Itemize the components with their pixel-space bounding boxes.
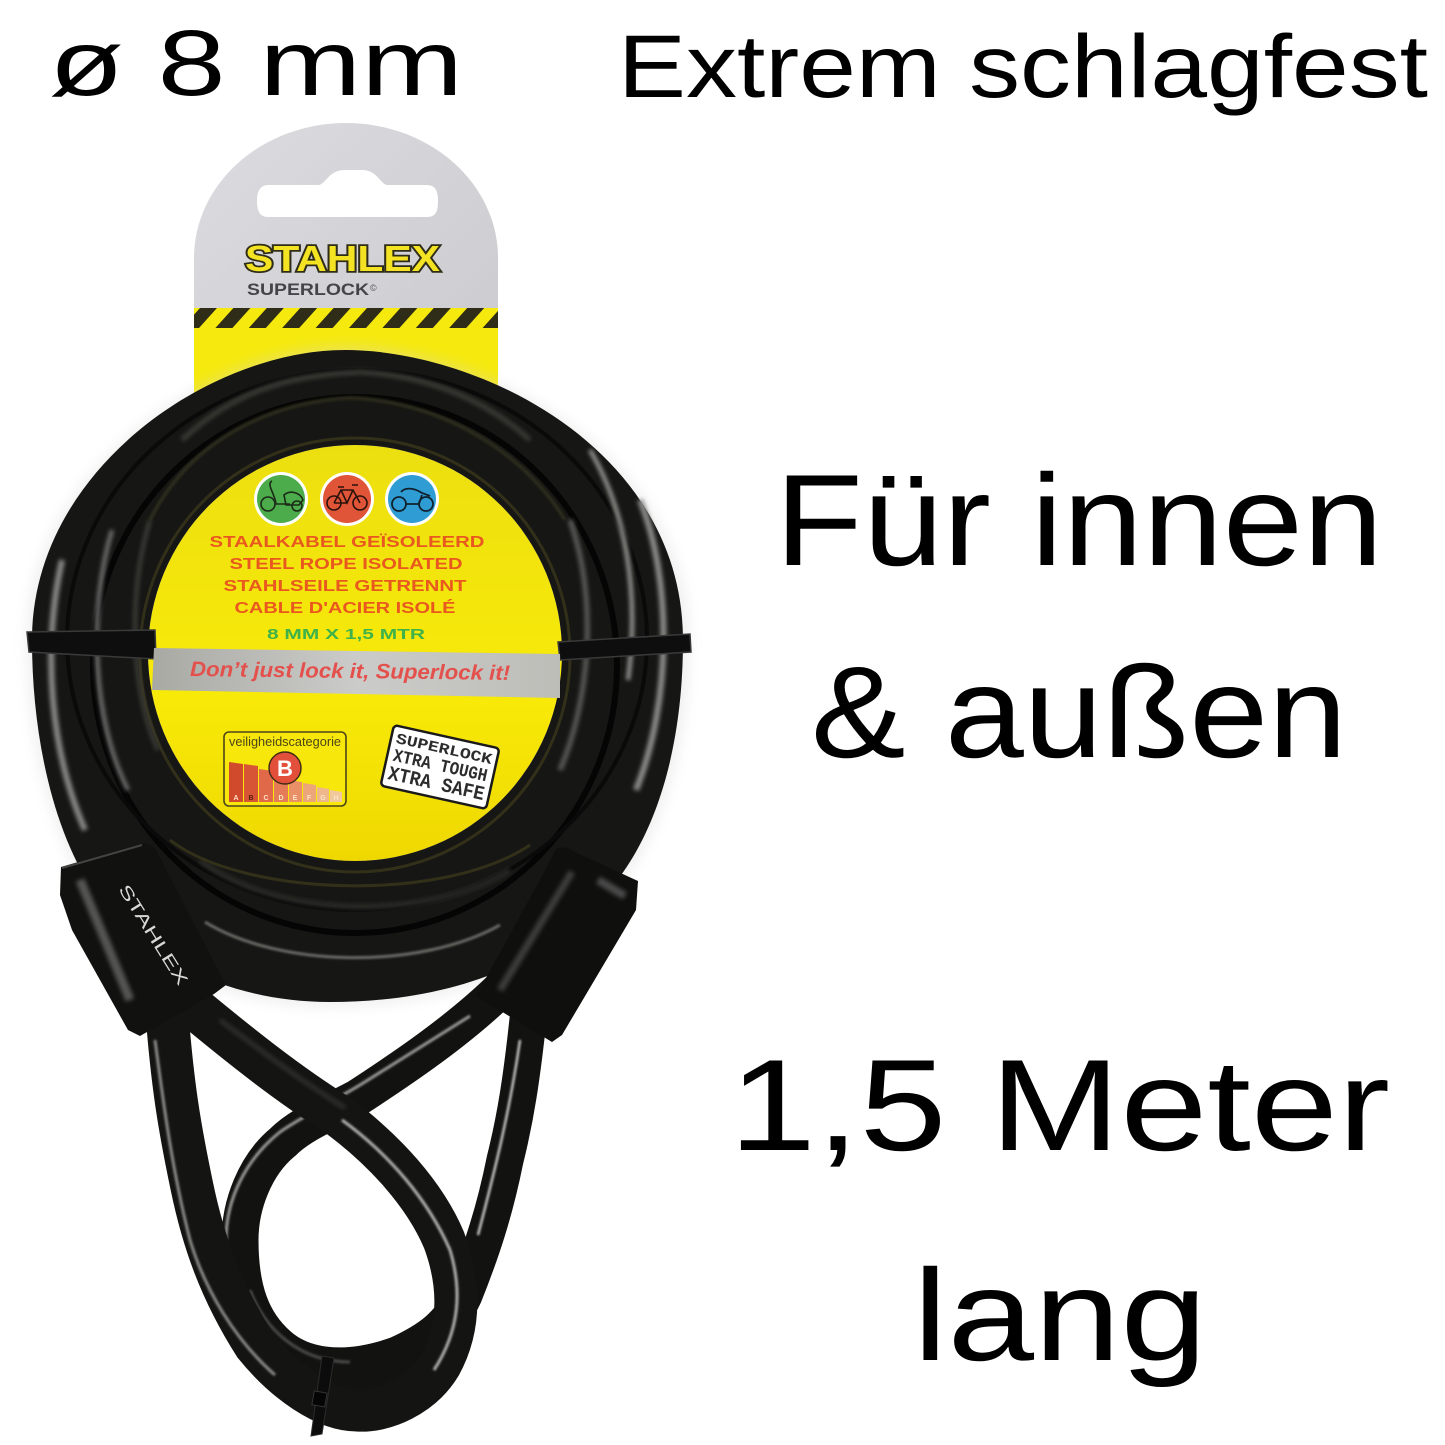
- soft shadow around the coil: [26, 346, 690, 1008]
- hang hole: [257, 170, 438, 217]
- cable tie: bottom: [311, 1356, 334, 1436]
- category B marker: [269, 752, 301, 784]
- sleeve: right: [476, 848, 638, 1042]
- safety category badge: A: [233, 795, 239, 802]
- sticker: Xtra tough, Xtra safe: [381, 725, 499, 809]
- text: indoor and outdoor: Für innen: [775, 447, 1383, 593]
- logo: Stahlex Superlock: [245, 238, 440, 299]
- yellow label disc: [148, 445, 562, 861]
- sticker: Xtra tough, Xtra safe: SUPERLOCK: [394, 731, 493, 769]
- heading: impact resistance: Extrem schlagfest: [618, 16, 1428, 116]
- safety category badge: C: [263, 795, 269, 802]
- text: length: lang: [913, 1242, 1207, 1388]
- safety category badge: E: [293, 795, 298, 802]
- text: indoor and outdoor: & außen: [811, 639, 1347, 785]
- label text: product names: STAALKABEL GEÏSOLEERD: [210, 533, 484, 551]
- safety category badge: B: [277, 756, 293, 781]
- coiled cable: [32, 350, 683, 1002]
- safety category badge: B: [248, 795, 254, 802]
- sleeve: left, with brand mark: STAHLEX: [115, 881, 192, 989]
- vehicle icon: bicycle: [320, 472, 374, 526]
- slogan band: Don’t just lock it, Superlock it!: [190, 658, 510, 685]
- sticker: Xtra tough, Xtra safe: XTRA SAFE: [386, 763, 486, 807]
- label text: product names: STEEL ROPE ISOLATED: [230, 556, 462, 573]
- packaging card: [194, 123, 498, 420]
- product: cable lock with packaging: [26, 123, 691, 1436]
- heading: diameter: ø 8 mm: [49, 11, 463, 115]
- text: length: [729, 1032, 1390, 1388]
- label text: product names: CABLE D'ACIER ISOLÉ: [234, 598, 456, 617]
- safety category badge: H: [333, 795, 339, 802]
- label text: product names: [210, 533, 484, 617]
- sticker: Xtra tough, Xtra safe: XTRA TOUGH: [391, 747, 489, 787]
- category bars: [229, 762, 342, 802]
- text: indoor and outdoor: [775, 447, 1383, 785]
- text: length: 1,5 Meter: [729, 1032, 1390, 1178]
- label text: product names: STAHLSEILE GETRENNT: [224, 578, 467, 595]
- safety category badge: F: [307, 795, 312, 802]
- label text: size: 8 MM X 1,5 MTR: [267, 626, 425, 643]
- safety category badge: veiligheidscategorie: [229, 734, 341, 749]
- vehicle icon: motorcycle: [385, 472, 439, 526]
- safety category badge: [224, 732, 346, 806]
- safety category badge: D: [278, 795, 284, 802]
- cable loop: front strand: [155, 1000, 457, 1410]
- cable tie: right: [558, 634, 691, 660]
- safety category badge: G: [320, 795, 326, 802]
- slogan band: [152, 648, 560, 698]
- vehicle icon: scooter: [254, 472, 308, 526]
- cable loop: back strand: [226, 985, 530, 1388]
- sleeve: left, with brand mark: [60, 844, 226, 1036]
- logo: Stahlex Superlock: SUPERLOCK: [247, 280, 370, 299]
- cable tie: left: [27, 630, 156, 659]
- logo: Stahlex Superlock: STAHLEX: [245, 238, 440, 279]
- logo: Stahlex Superlock: ©: [370, 283, 377, 293]
